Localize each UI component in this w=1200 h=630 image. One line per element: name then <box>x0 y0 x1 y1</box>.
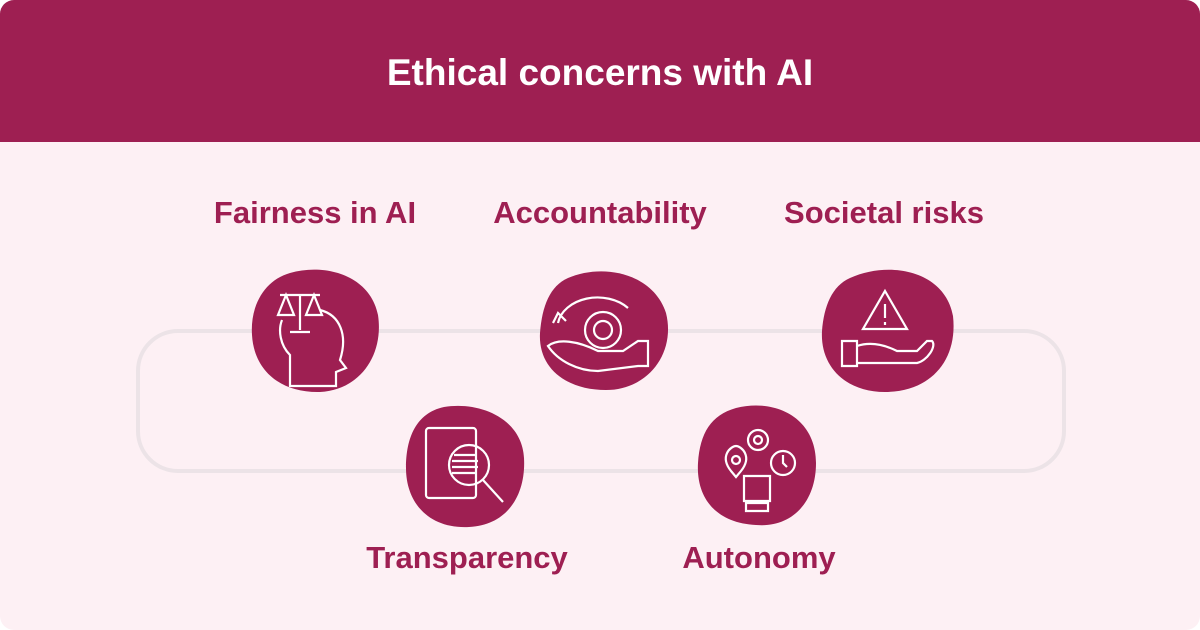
icon: autonomy <box>698 406 816 526</box>
label: Fairness: Fairness in AI <box>214 195 416 230</box>
header <box>0 0 1200 142</box>
icon: societal <box>822 270 954 392</box>
label: Accountability: Accountability <box>493 195 707 230</box>
label: Transparency: Transparency <box>366 540 568 575</box>
header: Ethical concerns with AI <box>387 52 813 93</box>
icon: transparency <box>406 406 524 528</box>
label: Societal: Societal risks <box>784 195 984 230</box>
label: Autonomy: Autonomy <box>682 540 836 575</box>
icon: fairness <box>252 270 379 392</box>
icon: accountability <box>540 271 668 390</box>
